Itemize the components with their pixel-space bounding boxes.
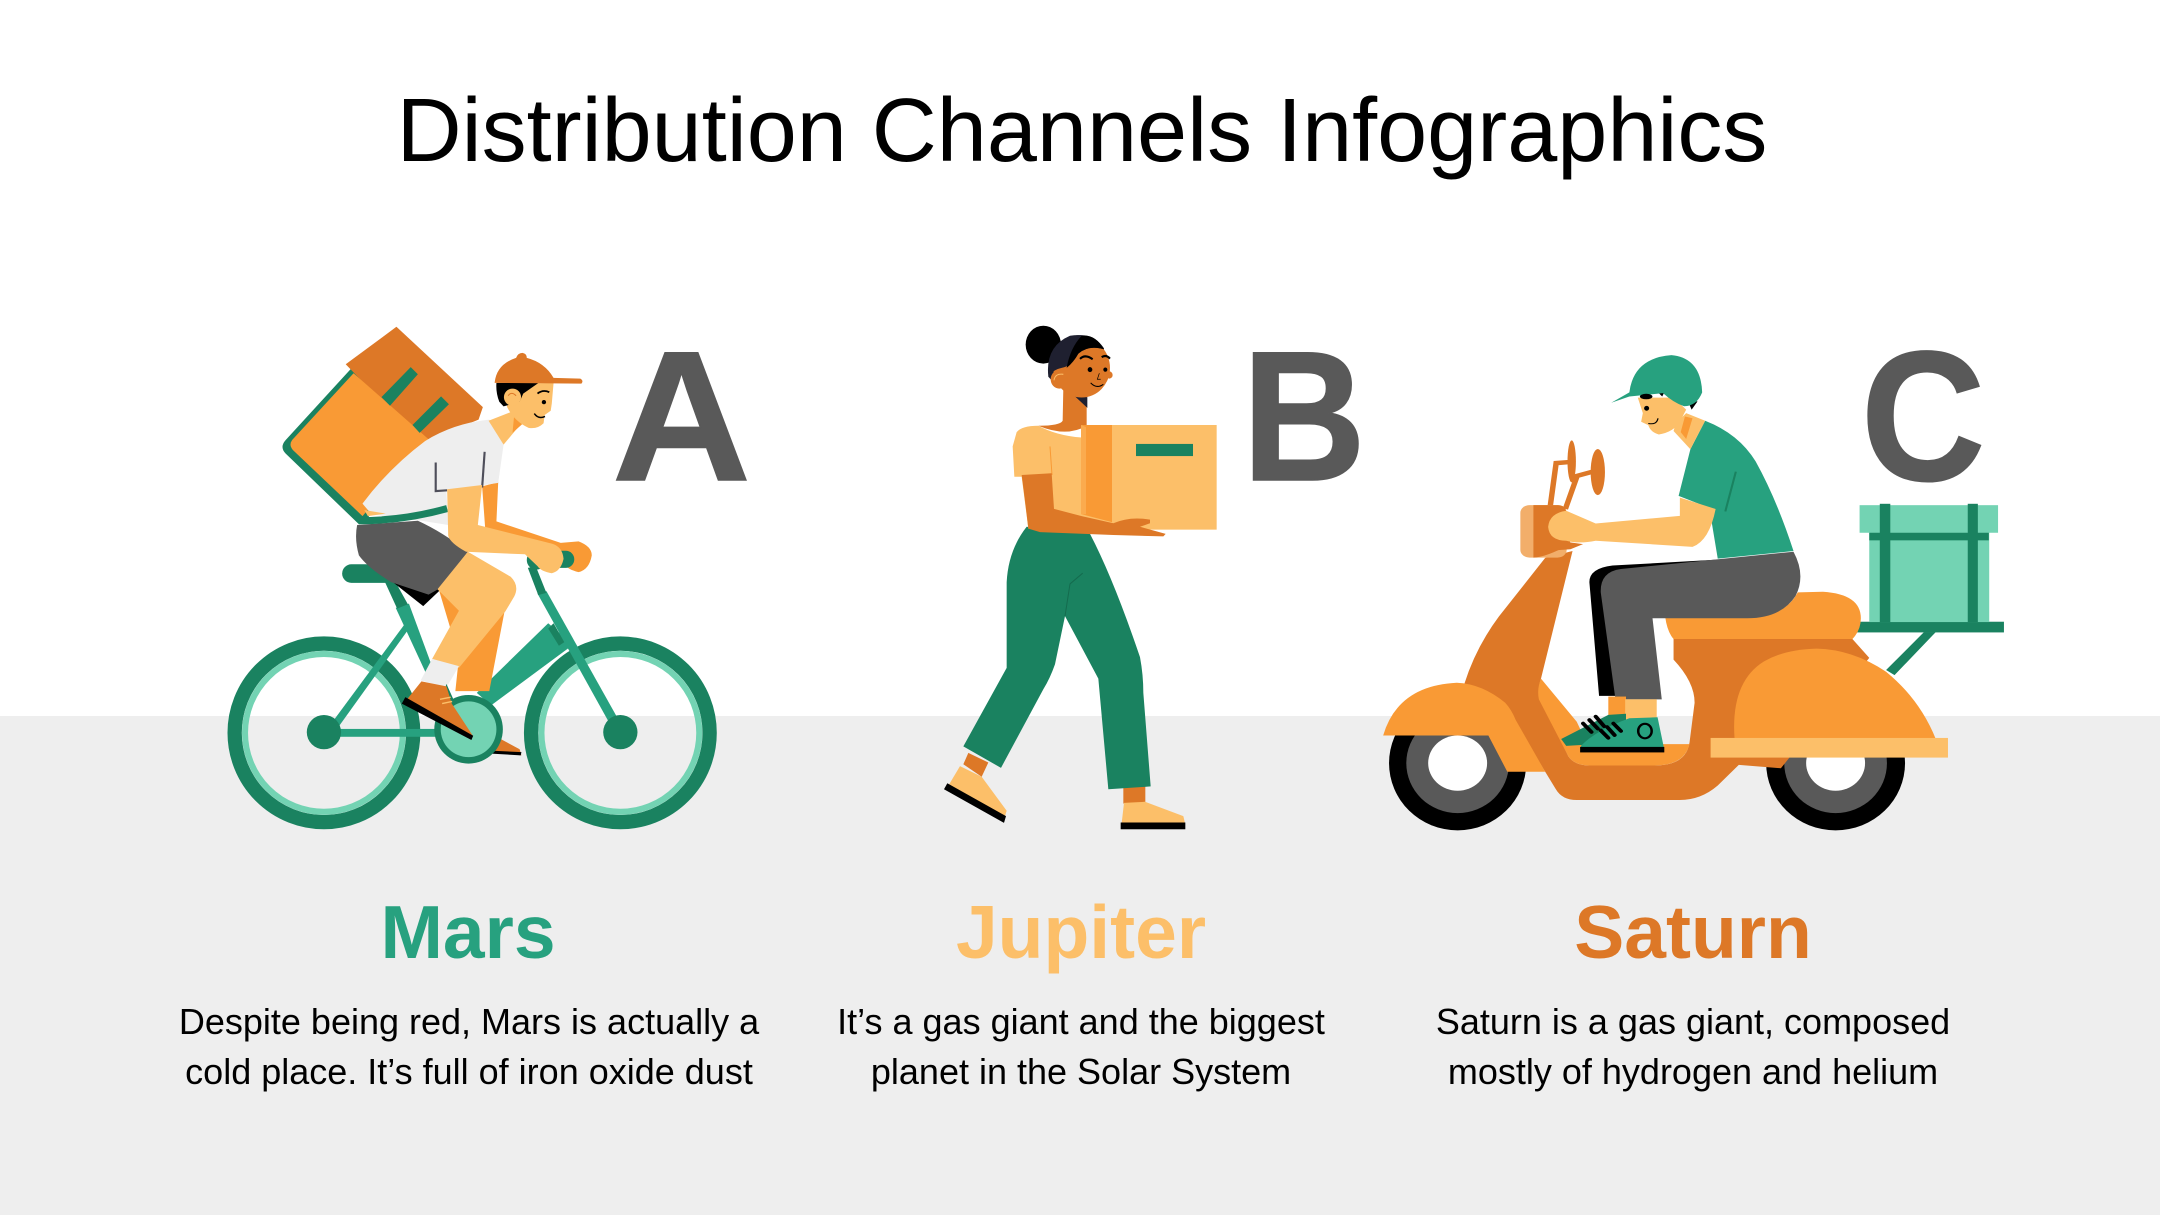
courier head with cap	[489, 353, 582, 445]
icon: mirrors	[1550, 440, 1605, 509]
description: Saturn: mostly of hydrogen and helium	[1448, 1051, 1938, 1092]
front fender	[1383, 683, 1545, 772]
description: Mars: Despite being red, Mars is actually a	[179, 1001, 760, 1042]
bicycle frame	[307, 550, 637, 749]
backpack strap	[359, 509, 447, 521]
scooter body	[1464, 551, 1869, 800]
letter B: B	[1242, 313, 1366, 519]
icon: front scooter wheel	[1389, 696, 1526, 830]
icon: front bicycle wheel	[531, 644, 710, 822]
heading: Saturn: Saturn	[1574, 890, 1812, 974]
icon: trailing foot	[944, 753, 1007, 823]
rear fender	[1734, 649, 1936, 739]
description: Mars: cold place. It’s full of iron oxide dust	[185, 1051, 753, 1092]
panel: Saturn scooter rider	[1383, 355, 2004, 830]
chainring	[434, 695, 503, 764]
panel: Jupiter parcel carrier	[944, 326, 1217, 829]
description: Jupiter: planet in the Solar System	[871, 1051, 1291, 1092]
far leg and shoe	[439, 591, 521, 755]
icon: rear rack and parcel	[1852, 504, 2004, 675]
seat	[1665, 592, 1861, 639]
delivery backpack	[282, 327, 483, 524]
front arm and hand	[447, 485, 564, 573]
headlight	[1520, 505, 1583, 558]
description: Saturn: Saturn is a gas giant, composed	[1436, 1001, 1950, 1042]
shorts	[356, 521, 468, 606]
carrying arm and hand	[1022, 473, 1166, 536]
far arm and hand	[482, 482, 592, 572]
icon: leading foot	[1121, 786, 1185, 829]
panel: Mars bicycle courier	[235, 327, 710, 822]
bumper	[1711, 738, 1948, 758]
description: Jupiter: It’s a gas giant and the biggest	[837, 1001, 1325, 1042]
cardboard box	[1081, 425, 1217, 530]
front leg, sock and shoe	[402, 552, 516, 740]
rider feet and shoes	[1561, 697, 1664, 752]
green trousers	[963, 527, 1151, 789]
icon: rear scooter wheel	[1766, 696, 1905, 830]
heading: Jupiter: Jupiter	[956, 890, 1206, 974]
letter C: C	[1861, 312, 1985, 519]
yellow shirt	[1013, 426, 1083, 529]
rider trousers	[1589, 552, 1800, 699]
icon: rear bicycle wheel	[235, 644, 413, 822]
neck and head	[1026, 326, 1113, 432]
letter A: A	[612, 312, 751, 519]
white t-shirt	[362, 420, 504, 525]
rider arm and hand	[1548, 498, 1716, 547]
rider t-shirt	[1679, 421, 1794, 559]
rider head with helmet	[1611, 355, 1705, 449]
ground band	[0, 716, 2160, 1215]
heading: Mars: Mars	[380, 890, 556, 974]
title: Distribution Channels Infographics	[397, 81, 1767, 181]
scooter footboard	[1538, 679, 1690, 766]
